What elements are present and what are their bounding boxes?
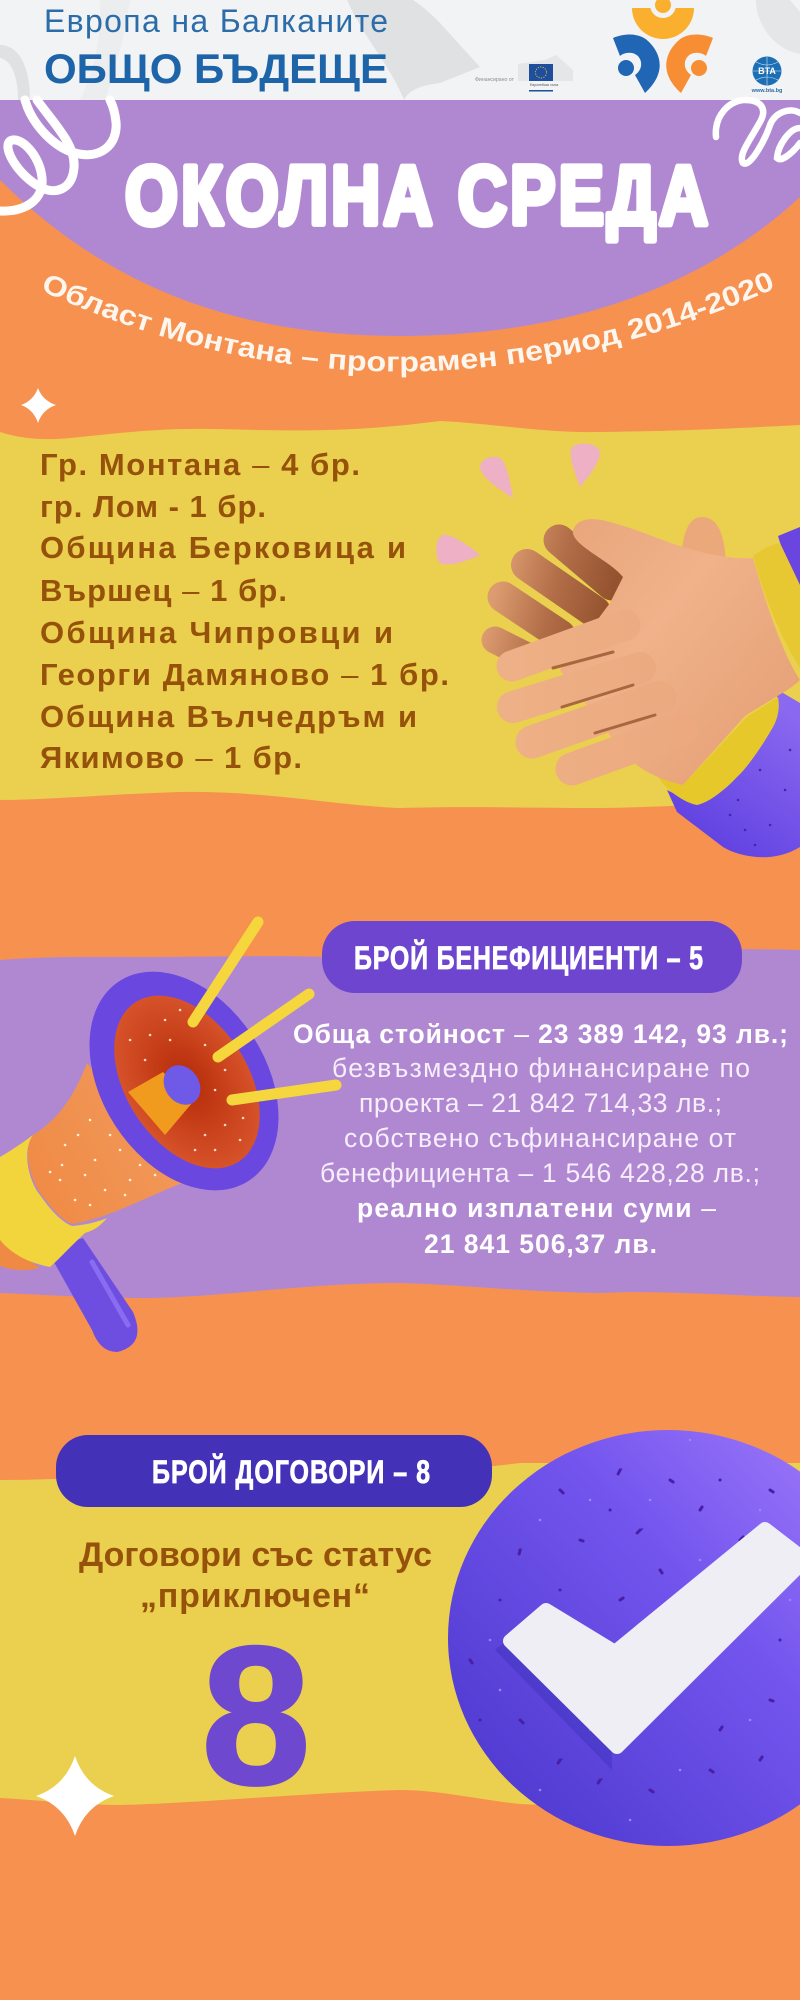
- BTA logo: BTA: [758, 66, 776, 76]
- top purple arc: [0, 100, 800, 336]
- interior speckles: [130, 1010, 243, 1150]
- inner circle: [156, 1058, 208, 1112]
- icon: check badge: [448, 1430, 800, 1846]
- BTA logo: [751, 56, 782, 94]
- pill: contracts: БРОЙ ДОГОВОРИ – 8: [152, 1453, 430, 1491]
- list line 6: Георги Дамяново – 1 бр.: [40, 657, 449, 692]
- list line 4: Въpшец – 1 бр.: [40, 573, 287, 608]
- dark speckles: [470, 1470, 780, 1792]
- paid line 2: 21 841 506,37 лв.: [424, 1229, 657, 1259]
- header bar: [0, 0, 800, 100]
- list line 2: гр. Лом - 1 бр.: [40, 489, 266, 524]
- grant line 1: безвъзмездно финансиране по: [332, 1053, 750, 1083]
- paid line 1: реално изплатени суми –: [357, 1193, 716, 1223]
- badge disc: [448, 1430, 800, 1846]
- interior: [84, 969, 290, 1195]
- sparkle top: [21, 388, 56, 423]
- check shadow: [495, 1610, 612, 1770]
- front fingers: [512, 625, 680, 769]
- list line 8: Якимово – 1 бр.: [40, 740, 302, 775]
- cone: [28, 1063, 185, 1224]
- icon: megaphone: [0, 922, 336, 1352]
- status line 1: Договори със статус: [79, 1536, 432, 1574]
- pill: beneficiaries: БРОЙ БЕНЕФИЦИЕНТИ – 5: [354, 939, 703, 977]
- BTA logo: www.bta.bg: [751, 88, 782, 94]
- curved subtitle: Област Монтана – програмен период 2014-2020: [44, 272, 772, 378]
- palm: [560, 519, 800, 785]
- contracts status text: [79, 1536, 432, 1615]
- grip tail: [0, 1240, 40, 1270]
- EU funding mark: [475, 55, 573, 92]
- project logo: [613, 0, 713, 93]
- yellow band 3: [0, 1463, 800, 1806]
- grip: [0, 1135, 107, 1267]
- co-financing line 1: собствено съфинансиране от: [344, 1123, 736, 1153]
- back fingers: [495, 540, 612, 655]
- pill: contracts: [56, 1435, 492, 1507]
- yellow band 1: [0, 421, 800, 808]
- status line 2: „приключен“: [140, 1577, 370, 1615]
- sound ray 1: [193, 922, 258, 1022]
- list line 5: Община Чипровци и: [40, 615, 393, 650]
- sparkle bottom: [36, 1756, 114, 1836]
- check mark: [510, 1529, 800, 1747]
- finger shadows: [553, 652, 655, 733]
- header title line 2: ОБЩО БЪДЕЩЕ: [44, 45, 388, 92]
- header title line 1: Европа на Балканите: [44, 3, 388, 39]
- pill: beneficiaries: [322, 921, 742, 993]
- list line 3: Община Берковица и: [40, 530, 406, 565]
- rim: [50, 937, 318, 1225]
- sound ray 3: [232, 1085, 336, 1100]
- scribble right: [716, 100, 800, 164]
- handle highlight: [92, 1262, 128, 1325]
- title: ОКОЛНА СРЕДА: [125, 149, 708, 243]
- grant line 2: проекта – 21 842 714,33 лв.;: [359, 1088, 722, 1118]
- icon: clapping hands: [495, 517, 800, 857]
- sound ray 2: [218, 994, 309, 1057]
- EU funding mark: Европейски съюз: [530, 83, 559, 87]
- EU funding mark: Финансирано от: [475, 77, 514, 83]
- inner wedge: [128, 1072, 192, 1135]
- locations list: [40, 447, 449, 775]
- co-financing line 2: бенефициента – 1 546 428,28 лв.;: [320, 1158, 760, 1188]
- financial details: [293, 1019, 788, 1259]
- total value: Обща стойност – 23 389 142, 93 лв.;: [293, 1019, 788, 1049]
- scribble left: [0, 100, 116, 211]
- speckles: [50, 1120, 155, 1205]
- list line 7: Община Вълчедръм и: [40, 699, 417, 734]
- handle: [50, 1238, 137, 1352]
- big number 8: 8: [201, 1605, 311, 1826]
- list line 1: Гр. Монтана – 4 бр.: [40, 447, 360, 482]
- upper cuff: [753, 527, 800, 668]
- purple band 2: [0, 949, 800, 1298]
- back thumb: [680, 517, 726, 570]
- icon: pink drops: [436, 444, 600, 564]
- lower cuff: [657, 690, 800, 857]
- light speckles: [490, 1440, 790, 1820]
